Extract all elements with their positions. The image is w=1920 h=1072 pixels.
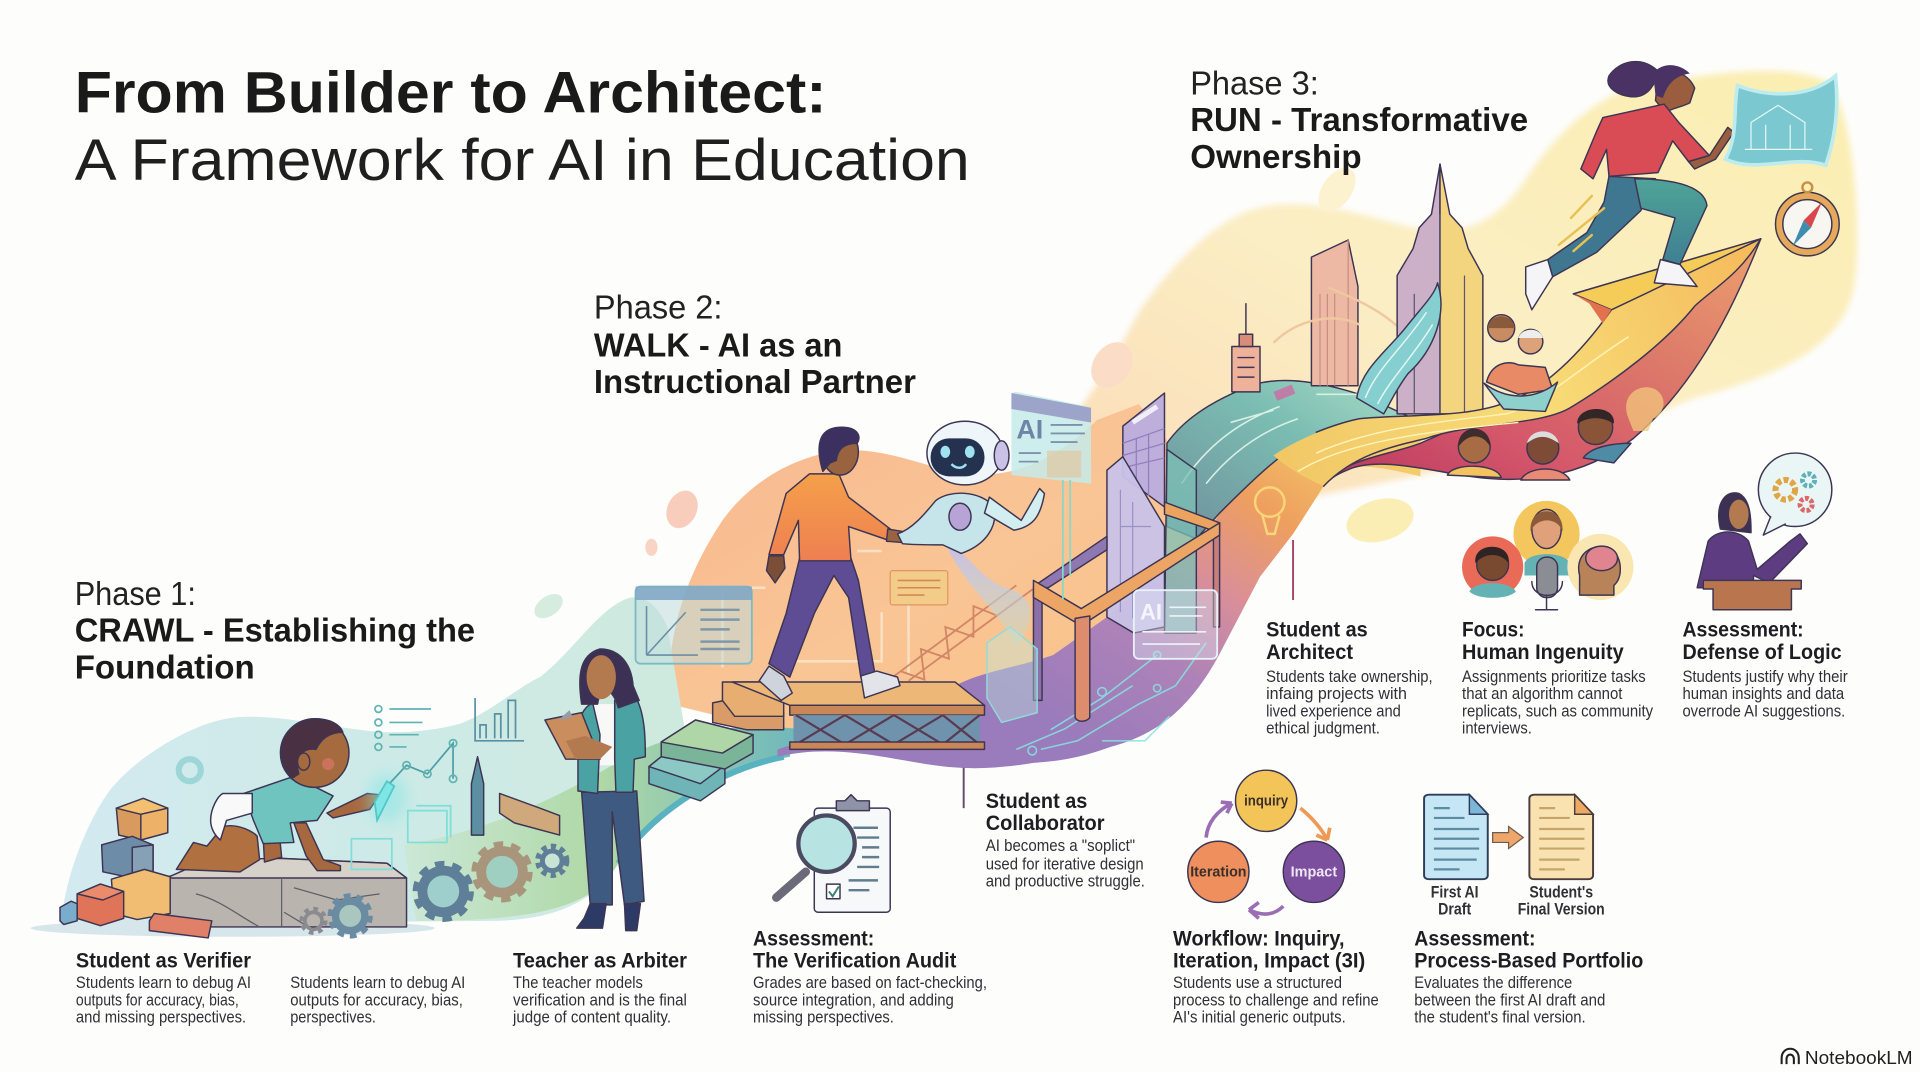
city skyline <box>1232 164 1483 414</box>
runner: RUN phase figure <box>1526 62 1734 310</box>
panel: AI window 2 <box>1134 590 1217 659</box>
diagram: draft to final documents: First AI <box>1431 884 1479 902</box>
text block: student as architect: Architect <box>1266 640 1353 664</box>
text block: defense of logic: Defense of Logic <box>1682 640 1842 664</box>
text block: student as architect: Students take ownership, <box>1266 668 1433 686</box>
text block: student as verifier <box>76 948 251 1026</box>
text block: teacher as arbiter <box>512 948 687 1026</box>
icon: gears <box>302 847 566 934</box>
text block: process-based portfolio: the student's final version. <box>1414 1008 1586 1026</box>
text block: student as verifier: and missing perspectives. <box>76 1008 246 1026</box>
text block: debug outputs: perspectives. <box>290 1008 376 1026</box>
text block: student as architect: lived experience and <box>1266 702 1401 720</box>
icon: blueprint <box>1725 76 1837 165</box>
text block: defense of logic <box>1682 618 1848 720</box>
text block: workflow 3I: AI's initial generic outputs. <box>1173 1008 1346 1026</box>
diagram: 3I cycle: inquiry <box>1244 794 1289 810</box>
text block: student as architect <box>1266 618 1433 737</box>
teacher: arbiter figure <box>545 649 645 931</box>
panel: AI window <box>1011 392 1091 600</box>
text block: process-based portfolio: Process-Based Portfolio <box>1414 948 1643 972</box>
text block: student as collaborator: AI becomes a "soplict" <box>986 837 1135 855</box>
text block: student as verifier: Student as Verifier <box>76 948 251 972</box>
heading: phase 2: Instructional Partner <box>594 364 916 401</box>
diagram: 3I cycle <box>1188 770 1344 918</box>
cloud accents <box>179 161 1419 781</box>
text block: teacher as arbiter: judge of content quality. <box>512 1008 671 1026</box>
logo: NotebookLM: NotebookLM <box>1805 1047 1913 1068</box>
icon: toy blocks <box>60 798 212 938</box>
heading: phase 2: WALK - AI as an <box>594 327 842 364</box>
title: From Builder to Architect: <box>75 61 827 126</box>
text block: student as verifier: outputs for accuracy, bias, <box>76 991 239 1009</box>
text block: student as collaborator: and productive struggle. <box>986 873 1145 891</box>
panel: notes card <box>890 571 948 605</box>
diagram: draft to final documents: Student's <box>1529 884 1593 902</box>
text block: student as verifier: Students learn to debug AI <box>76 974 251 992</box>
title: A Framework for AI in Education <box>75 128 970 193</box>
text block: verification audit: The Verification Audit <box>753 948 956 972</box>
text block: debug outputs: outputs for accuracy, bias, <box>290 991 463 1009</box>
heading: phase 1: Phase 1: <box>75 576 196 613</box>
heading: phase 3: Ownership <box>1190 139 1362 176</box>
text block: student as architect: ethical judgment. <box>1266 719 1380 737</box>
text block: focus: Assignments prioritize tasks <box>1462 668 1646 686</box>
text block: process-based portfolio: Assessment: <box>1414 926 1536 950</box>
text block: focus: that an algorithm cannot <box>1462 685 1623 703</box>
text block: verification audit: missing perspectives. <box>753 1008 894 1026</box>
text block: workflow 3I: process to challenge and refine <box>1173 991 1379 1009</box>
text block: focus: replicats, such as community <box>1462 702 1654 720</box>
text block: teacher as arbiter: verification and is the final <box>513 991 687 1009</box>
baby: CRAWL phase figure <box>176 719 380 872</box>
base stone block <box>31 858 435 937</box>
panel: AI window 2: AI <box>1140 600 1162 625</box>
holographic data icons <box>351 698 524 869</box>
heading: phase 2 <box>594 289 916 401</box>
text block: process-based portfolio <box>1414 926 1643 1026</box>
ribbon yellow band and arrow <box>1273 239 1761 486</box>
holographic cube <box>987 627 1037 722</box>
text block: workflow 3I: Workflow: Inquiry, <box>1173 926 1344 950</box>
flowing background ribbon <box>61 71 1857 924</box>
panel: chart window <box>636 587 752 664</box>
text block: verification audit: Assessment: <box>753 926 874 950</box>
text block: student as collaborator: used for iterative design <box>986 855 1144 873</box>
diagram: draft to final documents <box>1424 795 1605 919</box>
heading: phase 1: Foundation <box>75 649 255 686</box>
scaffold truss <box>888 585 1035 681</box>
heading: phase 1: CRAWL - Establishing the <box>75 613 475 650</box>
text block: defense of logic: overrode AI suggestions. <box>1682 702 1845 720</box>
diagram: draft to final documents: Draft <box>1438 901 1472 919</box>
man: WALK phase figure <box>759 427 902 700</box>
title <box>75 61 970 193</box>
text block: teacher as arbiter: Teacher as Arbiter <box>513 948 687 972</box>
platform and stairs <box>649 682 984 801</box>
icon: audit clipboard and magnifier <box>776 795 890 912</box>
text block: process-based portfolio: Evaluates the difference <box>1414 974 1572 992</box>
people on the ribbon <box>1447 315 1664 480</box>
robot: AI partner <box>898 421 1044 647</box>
text block: verification audit <box>753 926 987 1026</box>
icon: compass <box>1776 182 1839 256</box>
heading: phase 3: Phase 3: <box>1190 65 1319 102</box>
connector line: collaborator <box>963 768 965 808</box>
wooden frame <box>1033 502 1220 721</box>
text block: student as architect: infaing projects with <box>1266 685 1407 703</box>
icon: pencil and box <box>471 757 560 835</box>
text block: focus: Focus: <box>1462 618 1524 642</box>
text block: defense of logic: Assessment: <box>1682 618 1804 642</box>
text block: workflow 3I: Students use a structured <box>1173 974 1342 992</box>
panel: AI window: AI <box>1016 414 1043 444</box>
text block: debug outputs: Students learn to debug AI <box>290 974 465 992</box>
text block: verification audit: source integration, and adding <box>753 991 954 1009</box>
text block: focus <box>1462 618 1654 737</box>
text block: process-based portfolio: between the first AI draft and <box>1414 991 1605 1009</box>
text block: debug outputs <box>290 974 465 1026</box>
icon: speaker at podium with gears bubble <box>1697 453 1832 610</box>
text block: teacher as arbiter: The teacher models <box>513 974 643 992</box>
text block: verification audit: Grades are based on fact-checking, <box>753 974 987 992</box>
heading: phase 2: Phase 2: <box>594 289 722 326</box>
diagram: draft to final documents: Final Version <box>1518 901 1605 919</box>
text block: student as collaborator <box>986 789 1145 891</box>
diagram: 3I cycle: Iteration <box>1190 865 1247 881</box>
text block: student as architect: Student as <box>1266 618 1368 642</box>
icon: human ingenuity portraits and microphone <box>1462 501 1633 610</box>
text block: student as collaborator: Collaborator <box>986 811 1104 835</box>
diagram: 3I cycle: Impact <box>1291 865 1337 881</box>
circuit traces <box>722 551 1206 755</box>
connector line: architect <box>1292 540 1294 600</box>
heading: phase 3 <box>1190 65 1528 176</box>
text block: defense of logic: human insights and data <box>1682 685 1845 703</box>
glass book panels <box>1107 393 1196 633</box>
ribbon red band <box>1324 239 1761 486</box>
text block: focus: interviews. <box>1462 719 1532 737</box>
text block: workflow 3I: Iteration, Impact (3I) <box>1173 948 1365 972</box>
heading: phase 3: RUN - Transformative <box>1190 102 1528 139</box>
text block: defense of logic: Students justify why their <box>1682 668 1848 686</box>
heading: phase 1 <box>75 576 475 686</box>
text block: workflow 3I <box>1173 926 1379 1026</box>
text block: focus: Human Ingenuity <box>1462 640 1624 664</box>
lightbulb on ribbon <box>1255 487 1284 534</box>
text block: student as collaborator: Student as <box>986 789 1087 813</box>
